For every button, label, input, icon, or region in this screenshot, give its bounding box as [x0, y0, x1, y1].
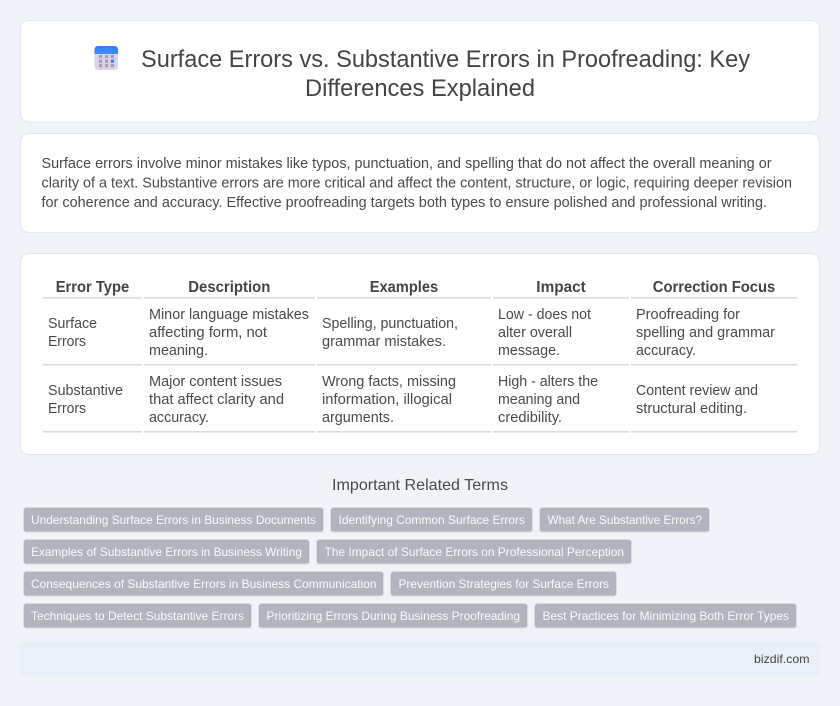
intro text	[42, 156, 792, 211]
table row: surface errors	[43, 307, 797, 366]
table row: substantive errors: Wrong facts, missing	[322, 374, 456, 390]
footer bar	[20, 642, 820, 676]
tag	[24, 572, 384, 596]
table row: substantive errors: Substantive	[48, 383, 123, 399]
tag: Prevention Strategies for Surface Errors	[398, 577, 609, 591]
tag	[24, 604, 252, 628]
tag: What Are Substantive Errors?	[548, 513, 702, 527]
intro text: clarity of a text. Substantive errors are more critical and affect the content, structure, or logic, requiring deeper revision	[42, 176, 792, 192]
tag	[24, 508, 324, 532]
table row: surface errors: affecting form, not	[149, 325, 267, 341]
table row: substantive errors: High - alters the	[498, 374, 598, 390]
heading: important related terms: Important Related Terms	[332, 477, 508, 494]
table row: substantive errors: meaning and	[498, 392, 580, 408]
footer brand: bizdif.com	[754, 652, 810, 666]
table row: substantive errors: Errors	[48, 401, 86, 417]
table row: surface errors: spelling and grammar	[636, 325, 775, 341]
tag	[258, 604, 528, 628]
table row: substantive errors: information, illogical	[322, 392, 452, 408]
table row: surface errors: Spelling, punctuation,	[322, 316, 458, 332]
table row: surface errors: accuracy.	[636, 343, 696, 359]
table header row: Correction Focus	[653, 279, 775, 296]
icon: calendar	[94, 46, 118, 70]
tag	[24, 540, 310, 564]
intro text: Surface errors involve minor mistakes like typos, punctuation, and spelling that do not affect the overall meaning or	[42, 156, 772, 172]
table row: substantive errors: Major content issues	[149, 374, 282, 390]
table row: surface errors: Surface	[48, 316, 97, 332]
tag	[540, 508, 710, 532]
title: Differences Explained	[305, 75, 535, 102]
table row: surface errors: alter overall	[498, 325, 572, 341]
title	[141, 46, 750, 102]
table row: substantive errors: that affect clarity and	[149, 392, 284, 408]
table header row: Error Type	[56, 279, 129, 296]
table row: surface errors: Proofreading for	[636, 307, 740, 323]
panel: introduction paragraph	[20, 134, 820, 232]
table header row	[43, 279, 797, 299]
tag	[534, 604, 796, 628]
table header row: Impact	[536, 279, 586, 296]
tag	[316, 540, 632, 564]
table row: substantive errors: credibility.	[498, 410, 562, 426]
tag: Consequences of Substantive Errors in Business Communication	[31, 577, 376, 591]
table header row: Examples	[370, 279, 438, 296]
tag: Identifying Common Surface Errors	[338, 513, 525, 527]
tag: Prioritizing Errors During Business Proofreading	[266, 609, 520, 623]
table row: surface errors: grammar mistakes.	[322, 334, 446, 350]
table row: substantive errors: arguments.	[322, 410, 394, 426]
tag: The Impact of Surface Errors on Professional Perception	[324, 545, 624, 559]
intro text: for coherence and accuracy. Effective proofreading targets both types to ensure polished and professional writing.	[42, 195, 767, 211]
tag: Best Practices for Minimizing Both Error Types	[542, 609, 789, 623]
panel: comparison table	[20, 254, 820, 454]
table row: surface errors: meaning.	[149, 343, 208, 359]
tag: Techniques to Detect Substantive Errors	[31, 609, 244, 623]
table header row: Description	[188, 279, 270, 296]
table row: surface errors: Low - does not	[498, 307, 591, 323]
table row: substantive errors: Content review and	[636, 383, 758, 399]
table row: surface errors: Errors	[48, 334, 86, 350]
table row: surface errors: Minor language mistakes	[149, 307, 309, 323]
tag: Examples of Substantive Errors in Business Writing	[31, 545, 302, 559]
tag	[330, 508, 532, 532]
panel: title header	[20, 20, 820, 122]
tag	[390, 572, 616, 596]
tag: Understanding Surface Errors in Business Documents	[31, 513, 316, 527]
table row: substantive errors: accuracy.	[149, 410, 209, 426]
table row: surface errors: message.	[498, 343, 560, 359]
title: Surface Errors vs. Substantive Errors in Proofreading: Key	[141, 46, 750, 73]
table row: substantive errors	[43, 374, 797, 433]
table row: substantive errors: structural editing.	[636, 401, 747, 417]
related terms tags	[24, 508, 796, 628]
